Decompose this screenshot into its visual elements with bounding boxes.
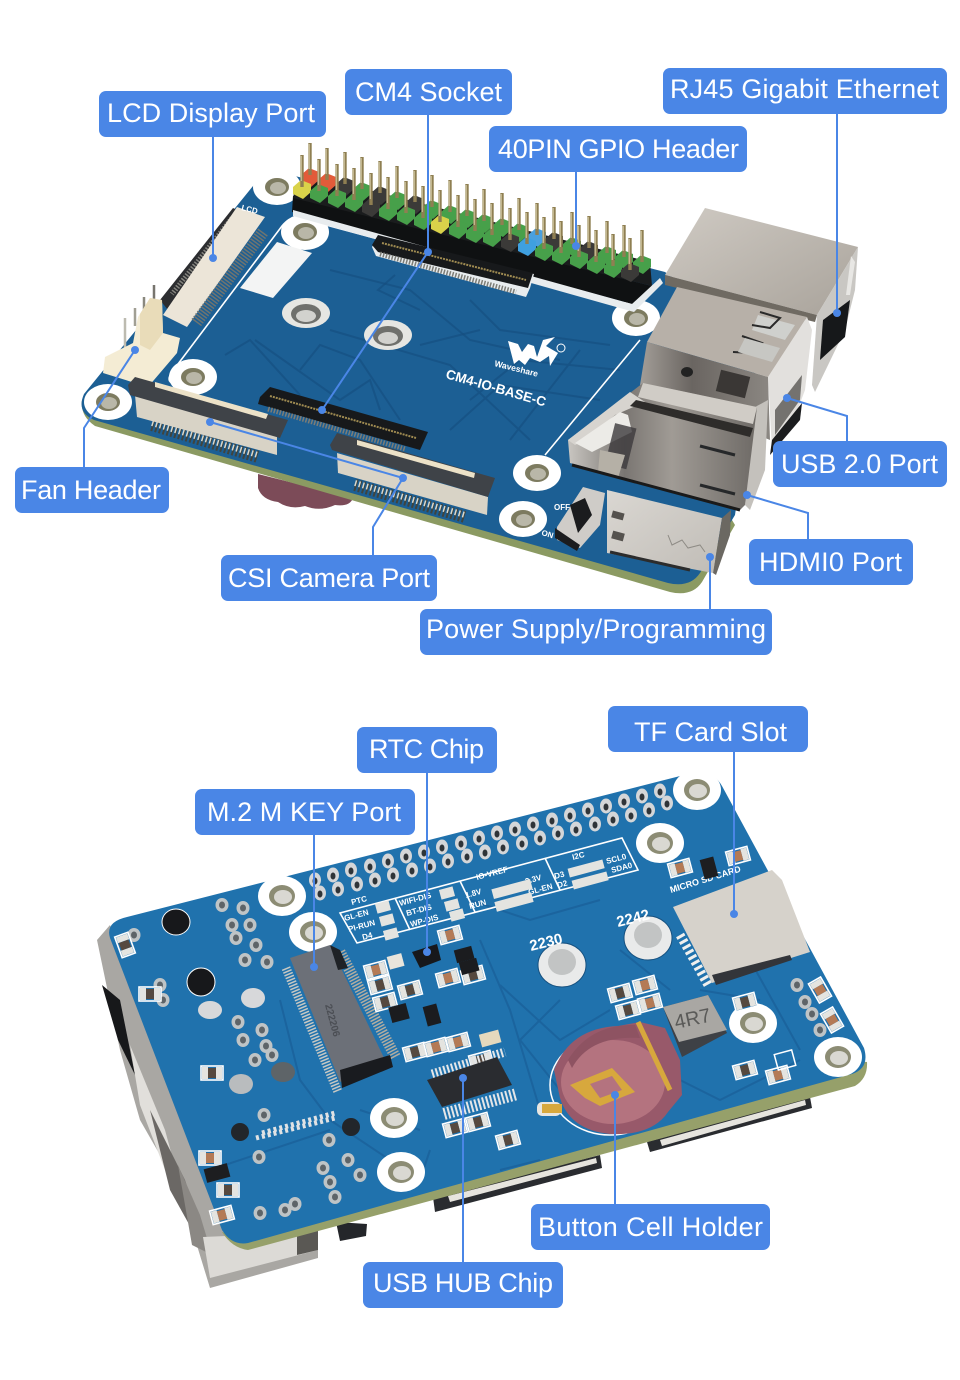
LCD display port connector: LCD xyxy=(241,203,259,216)
callout: RJ45 Gigabit Ethernet: RJ45 Gigabit Ethernet xyxy=(670,74,939,104)
callout: USB 2.0 Port: USB 2.0 Port xyxy=(781,449,938,479)
Waveshare logo and board name xyxy=(444,337,565,409)
jumper silkscreen table xyxy=(340,838,638,943)
LCD display port connector xyxy=(160,203,265,327)
callout: USB HUB Chip: USB HUB Chip xyxy=(373,1268,553,1298)
RTC chip and small SMD cluster xyxy=(364,925,520,1150)
callout: Fan Header: Fan Header xyxy=(21,475,161,505)
power switch: OFF xyxy=(554,503,570,512)
top board photo xyxy=(82,143,858,593)
jumper silkscreen table: I2C xyxy=(571,850,586,862)
callout: M.2 M KEY Port: M.2 M KEY Port xyxy=(207,797,401,827)
callout: 40PIN GPIO Header: 40PIN GPIO Header xyxy=(498,134,739,164)
callout: CM4 Socket xyxy=(318,69,512,414)
mounting standoffs 2230 and 2242: 2230 xyxy=(528,930,564,955)
jumper silkscreen table: PTC xyxy=(350,894,368,907)
callout: RTC Chip xyxy=(357,727,497,956)
traces xyxy=(225,270,620,440)
jumper silkscreen table: D4 xyxy=(361,930,374,942)
jumper silkscreen table: BT-DIS xyxy=(405,902,433,918)
callout: Button Cell Holder xyxy=(531,1091,770,1250)
mounting holes xyxy=(258,770,862,1192)
callout: USB HUB Chip xyxy=(363,1074,563,1308)
fan header xyxy=(103,285,180,387)
callout: TF Card Slot: TF Card Slot xyxy=(634,717,787,747)
power switch xyxy=(540,487,605,551)
M.2 M KEY port: 222206 xyxy=(322,1003,341,1038)
jumper silkscreen table: WIFI-DIS xyxy=(398,891,433,908)
callout: Power Supply/Programming xyxy=(420,553,772,655)
coin holder knob under board xyxy=(258,474,353,509)
40PIN GPIO header xyxy=(292,143,663,312)
white silk patch xyxy=(240,242,312,298)
jumper silkscreen table: PI-RUN xyxy=(347,918,376,934)
jumper silkscreen table: WP-DIS xyxy=(409,913,440,929)
TF card slot: MICRO SD CARD xyxy=(669,864,742,895)
jumper silkscreen table: D2 xyxy=(556,878,569,890)
callout: RJ45 Gigabit Ethernet xyxy=(663,68,947,317)
board surface xyxy=(82,174,760,584)
right side SMD parts xyxy=(733,977,844,1085)
CSI camera port right xyxy=(330,433,495,517)
callout: 40PIN GPIO Header xyxy=(489,126,747,250)
TF card slot xyxy=(668,846,810,985)
CM4 socket lower xyxy=(258,387,428,450)
jumper silkscreen table: 1.8V xyxy=(464,887,483,900)
Waveshare logo and board name: CM4-IO-BASE-C xyxy=(444,366,548,409)
rear connectors under board xyxy=(97,925,812,1288)
callout: USB 2.0 Port xyxy=(773,394,947,487)
callout: HDMI0 Port: HDMI0 Port xyxy=(759,547,902,577)
jumper silkscreen table: SCL0 xyxy=(605,852,628,866)
jumper silkscreen table: GL-EN xyxy=(343,908,370,923)
USB 2.0 connectors xyxy=(640,287,812,455)
jumper silkscreen table: 3.3V xyxy=(524,873,543,886)
callout: M.2 M KEY Port xyxy=(195,789,415,971)
GPIO solder joints xyxy=(309,784,673,900)
mounting standoffs 2230 and 2242: 2242 xyxy=(615,906,651,931)
inductor 4R7 xyxy=(608,975,727,1057)
bottom board photo xyxy=(97,770,867,1288)
back row pins xyxy=(301,143,651,274)
callout: TF Card Slot xyxy=(608,706,808,918)
button cell holder xyxy=(537,1022,682,1135)
jumper silkscreen table: IO-VREF xyxy=(475,865,509,882)
board edge xyxy=(222,1060,867,1250)
front row pins xyxy=(293,155,639,282)
callout: Button Cell Holder: Button Cell Holder xyxy=(538,1212,763,1242)
USB HUB chip xyxy=(427,1052,517,1114)
callout: CSI Camera Port xyxy=(206,418,437,601)
callout: HDMI0 Port xyxy=(743,491,913,585)
jumper silkscreen table: GL-EN xyxy=(527,882,554,897)
callout: Fan Header xyxy=(15,346,169,513)
callout: RTC Chip: RTC Chip xyxy=(369,734,484,764)
M.2 M KEY port xyxy=(286,945,396,1092)
board surface xyxy=(109,772,865,1243)
board edge xyxy=(82,400,735,593)
callout: LCD Display Port: LCD Display Port xyxy=(107,98,315,128)
callout: Power Supply/Programming: Power Supply/Programming xyxy=(426,614,766,644)
CSI camera port left xyxy=(128,377,288,457)
jumper silkscreen table: RUN xyxy=(468,898,487,911)
CM4 socket upper xyxy=(372,235,534,297)
power switch: ON xyxy=(540,528,555,540)
Waveshare logo and board name: Waveshare xyxy=(494,358,539,379)
silk border xyxy=(169,218,650,455)
standoffs xyxy=(282,298,412,350)
mounting standoffs 2230 and 2242 xyxy=(528,906,672,987)
RJ45 Ethernet connector xyxy=(665,208,858,392)
callout: CSI Camera Port: CSI Camera Port xyxy=(228,563,430,593)
jumper silkscreen table: D3 xyxy=(553,869,566,881)
mounting holes xyxy=(84,169,660,537)
HDMI0 connector xyxy=(568,383,768,510)
inductor 4R7: 4R7 xyxy=(672,1005,713,1034)
Type-C power connector xyxy=(607,490,731,575)
callout: CM4 Socket: CM4 Socket xyxy=(355,77,502,107)
callout: LCD Display Port xyxy=(99,91,326,262)
jumper silkscreen table: SDA0 xyxy=(610,861,634,875)
traces xyxy=(210,900,800,1180)
left side solder joints and vias xyxy=(115,898,366,1225)
